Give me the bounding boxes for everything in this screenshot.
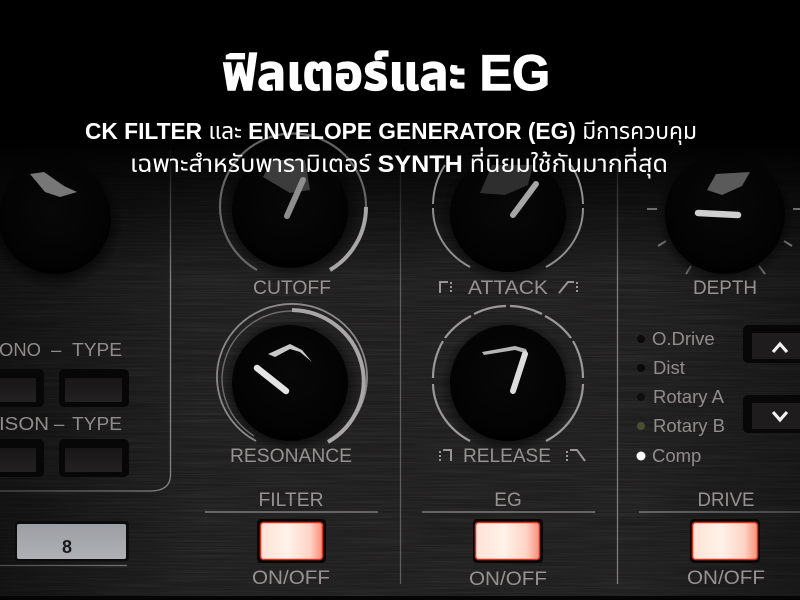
effect list (636, 328, 725, 466)
knob pointer (257, 368, 286, 391)
effect list: Rotary A (653, 386, 725, 407)
effect list: O.Drive (652, 328, 715, 349)
button: down arrow (743, 395, 800, 433)
mono type group: TYPE (72, 339, 122, 360)
knob: left partial (0, 154, 123, 290)
button: mono (0, 369, 44, 407)
button: unison (0, 439, 44, 477)
knob pointer (513, 354, 525, 391)
button: up arrow (743, 325, 800, 363)
label: resonance: RESONANCE (230, 446, 352, 467)
display: value 8: 8 (62, 537, 72, 557)
effect list: Comp (652, 445, 701, 466)
unison type group (0, 413, 129, 477)
display: value 8 (15, 521, 129, 561)
subtitle line 1: CK FILTER และ ENVELOPE GENERATOR (EG) มีการควบคุม (85, 118, 697, 145)
button: unison type (59, 439, 129, 477)
label: attack: ATTACK (468, 278, 548, 299)
knob: cutoff (220, 133, 366, 280)
knob pointer (698, 213, 738, 215)
label: eg on/off: ON/OFF (469, 569, 547, 590)
button: eg lit (473, 519, 543, 563)
button: drive lit (690, 519, 760, 563)
label: cutoff: CUTOFF (253, 278, 331, 299)
effect list: Rotary B (653, 415, 725, 436)
label: mono type: ONO (0, 339, 41, 360)
effect list: Dist (653, 357, 685, 378)
knob: release (433, 306, 583, 454)
button: mono type (59, 369, 129, 407)
label: depth: DEPTH (693, 278, 757, 299)
knob: depth (647, 148, 800, 286)
knob pointer (513, 184, 536, 215)
label: drive on/off: ON/OFF (687, 568, 765, 589)
label: attack (440, 278, 577, 299)
label: release: RELEASE (463, 446, 551, 467)
label: eg: EG (494, 490, 522, 511)
knob pointer (287, 180, 303, 216)
unison type group: TYPE (72, 413, 122, 434)
label: drive: DRIVE (698, 490, 754, 511)
button: filter lit (257, 519, 326, 563)
panel divider lines (0, 150, 800, 584)
unison type group: – (54, 413, 65, 434)
knob: attack (433, 149, 583, 285)
mono type group: – (51, 339, 62, 360)
label: release (440, 446, 585, 467)
label: filter: FILTER (258, 490, 324, 511)
subtitle line 2: เฉพาะสำหรับพารามิเตอร์ SYNTH ที่นิยมใช้กันมากที่สุด (130, 147, 668, 179)
label: filter on/off: ON/OFF (252, 568, 330, 589)
subtitle (85, 118, 697, 179)
label: unison type: ISON (0, 413, 49, 434)
title: ฟิลเตอร์และ EG (222, 45, 550, 101)
mono type group (0, 339, 129, 407)
knob: resonance (217, 304, 367, 454)
